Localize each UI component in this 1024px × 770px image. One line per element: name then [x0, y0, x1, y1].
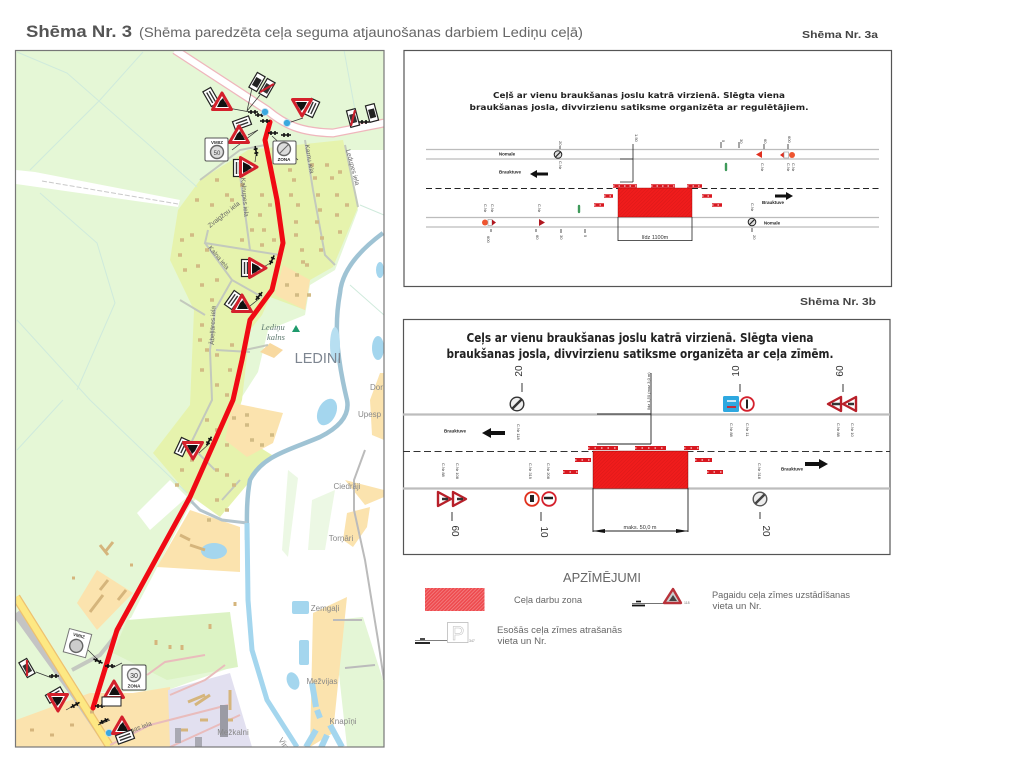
map labels	[123, 144, 383, 756]
labels 3a: 5	[583, 235, 588, 238]
labels 3a: 20	[752, 235, 757, 240]
labels 3a: 600	[486, 236, 491, 243]
title: (Shēma paredzēta ceļa seguma atjaunošanas darbiem Lediņu ceļā)	[139, 25, 583, 40]
work zone 3a	[618, 188, 692, 217]
labels 3a: C.Nr	[490, 204, 495, 213]
map labels: Kalnupes iela	[239, 178, 249, 217]
map labels: Rīgas iela	[123, 720, 153, 737]
sign group: far right plates	[346, 104, 379, 127]
panel: map	[15, 50, 384, 756]
heading 3b	[446, 331, 834, 361]
heading 3a: braukšanas josla, divvirzienu satiksme organizēta ar regulētājiem.	[470, 102, 808, 112]
legend: work zone	[425, 588, 583, 611]
heading 3b: braukšanas josla, divvirzienu satiksme organizēta ar ceļa zīmēm.	[446, 347, 834, 361]
map labels: Kalna iela	[206, 245, 230, 271]
sign group: mid road warning	[242, 258, 266, 278]
labels 3a: C.Nr	[786, 163, 791, 172]
map labels: Torņāri	[329, 534, 353, 543]
labels 3a: 30	[559, 235, 564, 240]
labels 3b: 60	[449, 525, 460, 537]
route: closed road section	[93, 122, 283, 708]
sign: 30 zone: ZONA	[128, 684, 141, 688]
map labels: Upesp	[358, 410, 382, 419]
sign group: west warning	[45, 687, 68, 711]
sign: 50 zone: VMIIZ	[211, 140, 223, 145]
sign: zone end	[273, 141, 296, 164]
map labels: Zemgaļi	[311, 604, 339, 613]
heading 3a: Ceļš ar vienu braukšanas joslu katrā virzienā. Slēgta viena	[493, 90, 785, 100]
panel: legend	[415, 570, 850, 647]
labels 3b: C.Nr 108	[455, 463, 460, 480]
labels 3b: C.Nr 318	[757, 463, 762, 480]
sign group: entry warning	[230, 116, 252, 142]
map labels: Dor	[370, 383, 383, 392]
sign: 30 zone: 30	[130, 673, 138, 680]
labels 3a: C.Nr	[760, 163, 765, 172]
signs 3a	[482, 142, 795, 233]
legend: temporary sign: 118	[684, 601, 690, 605]
labels 3b: Brauktuve	[781, 466, 803, 472]
labels 3b: 20	[514, 365, 525, 377]
map signs	[19, 72, 379, 744]
legend: temporary sign	[632, 589, 850, 612]
sign group: upper road warning	[234, 158, 257, 176]
sign: 50 zone	[205, 138, 228, 161]
sign group: west plates	[19, 658, 35, 678]
labels 3a: C.Nr	[558, 161, 563, 170]
heading: scheme 3b: Shēma Nr. 3b	[800, 297, 876, 308]
sign: 30 zone	[122, 665, 146, 690]
panel: scheme 3a	[404, 50, 892, 286]
dimension 3a	[618, 144, 692, 241]
labels 3a: Nomale	[764, 220, 781, 226]
arrows 3b	[482, 428, 828, 469]
dimension 3b: līdz 1,50 (maz 3,0 m)	[646, 372, 651, 410]
sign: 70 zone tilted: VMIIZ	[72, 632, 86, 640]
lower signs 3b	[438, 492, 767, 521]
labels 3a: C.Nr	[537, 204, 542, 213]
labels 3b: C.Nr 118	[516, 424, 521, 440]
map labels: Mežvijas	[306, 677, 338, 686]
legend: temporary sign: vieta un Nr.	[712, 601, 762, 612]
sign: zone end: ZONA	[278, 157, 291, 162]
labels 3b: C.Nr 88	[836, 423, 841, 438]
labels 3b: 60	[835, 365, 846, 377]
labels 3a: 5	[721, 140, 726, 143]
sign group: south start warning	[102, 681, 124, 706]
legend: existing sign: Esošās ceļa zīmes atrašanās	[497, 625, 622, 636]
sign: 70 zone tilted	[63, 629, 92, 658]
labels 3b: 10	[731, 365, 742, 377]
barriers 3b	[563, 448, 723, 472]
dimension 3b: maks. 50,0 m	[623, 525, 657, 531]
title: Shēma Nr. 3	[26, 22, 132, 41]
labels 3b: C.Nr 10	[850, 423, 855, 438]
legend: existing sign	[415, 622, 622, 647]
map labels: Ciedrāji	[333, 482, 361, 491]
heading 3b: Ceļs ar vienu braukšanas joslu katrā virzienā. Slēgta viena	[466, 331, 814, 345]
map labels: LEDINI	[295, 351, 341, 367]
map labels: Ābeļlāres iela	[208, 305, 217, 345]
sign group: detour plates	[249, 72, 275, 98]
labels 3a: 60	[763, 139, 768, 144]
sign group: hill warning	[224, 290, 252, 312]
sign: 50 zone: 50	[214, 151, 221, 157]
legend: work zone: Ceļa darbu zona	[514, 595, 583, 606]
labels 3a: C.Nr	[791, 163, 796, 172]
legend: temporary sign: Pagaidu ceļa zīmes uzstādīšanas	[712, 590, 850, 601]
labels 3a: 20	[558, 141, 563, 146]
road lines 3b	[403, 414, 890, 488]
sign group: lower road warning	[174, 437, 202, 459]
map labels: Virza	[276, 736, 294, 756]
title	[26, 22, 583, 41]
labels 3a: 600	[787, 136, 792, 143]
map labels: Karnu iela	[303, 144, 315, 175]
map labels: Zvaigžņu iela	[207, 200, 242, 230]
heading: scheme 3a: Shēma Nr. 3a	[802, 30, 879, 41]
heading 3a	[470, 90, 808, 112]
legend heading: APZĪMĒJUMI	[563, 570, 641, 585]
labels 3a: Nomale	[499, 152, 516, 156]
map labels: kalns	[267, 332, 286, 342]
labels 3a: Brauktuve	[762, 200, 784, 205]
upper signs 3b	[510, 383, 856, 412]
map labels: Ledupes iela	[344, 149, 360, 186]
labels 3a: 30	[739, 139, 744, 144]
sign group: south end warning	[112, 717, 135, 744]
legend: existing sign: 347	[469, 639, 475, 643]
labels 3b: C.Nr 319	[528, 463, 533, 480]
labels 3a	[483, 134, 796, 243]
sign group: top left warning	[203, 87, 232, 110]
labels 3b: 20	[760, 525, 771, 537]
sign group: top right warning	[292, 98, 320, 118]
labels 3a: C.Nr	[750, 203, 755, 212]
labels 3b: C.Nr 88	[441, 463, 446, 478]
labels 3b: C.Nr 88	[729, 423, 734, 438]
panel: scheme 3b	[403, 320, 890, 554]
map labels: Mežkalni	[217, 728, 249, 737]
labels 3a: Brauktuve	[499, 170, 521, 174]
labels 3b: C.Nr 11	[745, 423, 750, 437]
dimension 3a: līdz 1100m	[642, 235, 669, 241]
labels 3b: Brauktuve	[444, 428, 466, 434]
map labels: Lediņu	[260, 322, 285, 333]
work zone 3b	[593, 451, 688, 488]
labels 3b	[441, 365, 855, 538]
barriers 3a	[594, 186, 722, 205]
labels 3a: 60	[535, 235, 540, 240]
legend: existing sign: P	[452, 624, 464, 645]
labels 3b: 10	[538, 526, 549, 538]
dimension 3b	[593, 372, 688, 533]
labels 3b: C.Nr 208	[546, 463, 551, 480]
labels 3a: 1.50	[634, 134, 639, 143]
labels 3a: C.Nr	[483, 204, 488, 213]
map labels: Knapīņi	[329, 717, 357, 726]
road lines 3a	[426, 150, 879, 227]
legend: existing sign: vieta un Nr.	[498, 636, 546, 647]
arrows 3a	[530, 170, 793, 200]
